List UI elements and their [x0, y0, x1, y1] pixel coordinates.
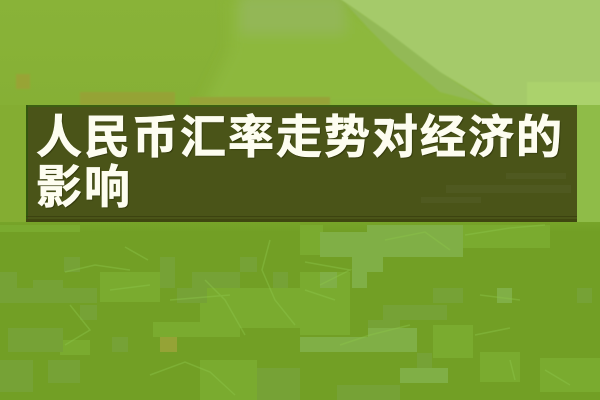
panel: title background — [26, 105, 577, 222]
muted grey-green patches — [0, 257, 592, 400]
light branching texture — [65, 225, 570, 395]
pale green patches — [300, 225, 512, 383]
brighter green patches — [0, 225, 600, 400]
title: 人民币汇率走势对经济的影响 — [36, 111, 564, 213]
olive speck — [160, 337, 177, 352]
